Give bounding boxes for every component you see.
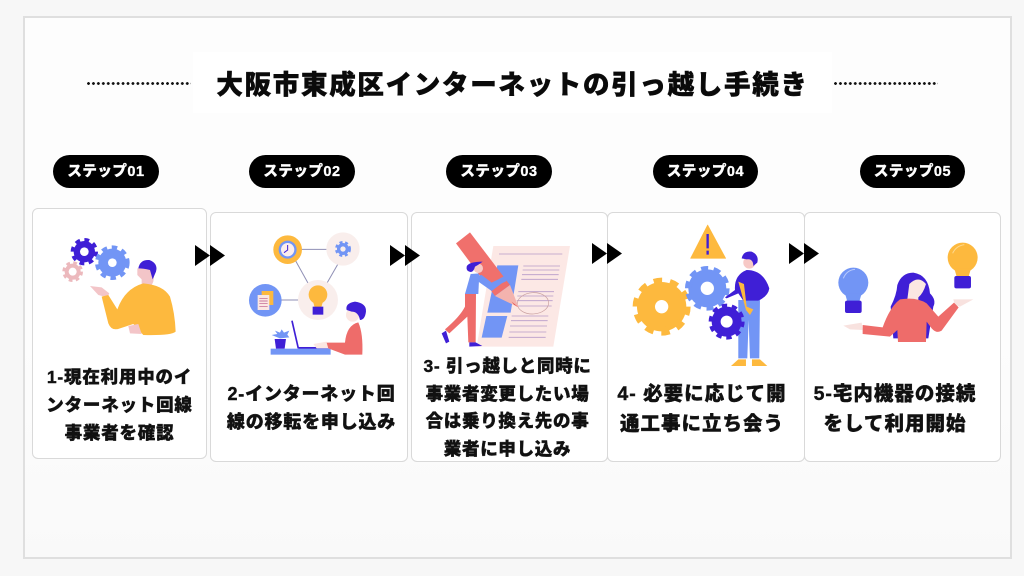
step badge 04: ステップ04 xyxy=(667,164,744,180)
right dotted rule xyxy=(834,82,938,85)
text: step 2 xyxy=(226,384,396,432)
icon: step 1 man with gears xyxy=(65,241,176,335)
left dotted rule xyxy=(87,82,191,85)
arrow: step 4 to 5 xyxy=(789,243,819,264)
text: step 3: 業者に申し込み xyxy=(444,439,571,459)
title: 大阪市東成区インターネットの引っ越し手続き xyxy=(216,70,809,100)
text: step 5 xyxy=(814,383,976,435)
step badge 01: ステップ01 xyxy=(67,164,145,180)
text: step 3: 3- 引っ越しと同時に xyxy=(423,356,592,376)
text: step 3: 合は乗り換え先の事 xyxy=(426,411,589,431)
text: step 2: 線の移転を申し込み xyxy=(227,412,396,432)
step badge 04 xyxy=(653,155,758,188)
arrow: step 1 to 2 xyxy=(195,245,225,266)
icon: step 5 woman with light bulbs xyxy=(838,243,978,342)
icon: step 2 network and person at laptop xyxy=(249,232,366,355)
text: step 1: 事業者を確認 xyxy=(65,423,174,443)
icon: step 3 person with pencil and document xyxy=(442,232,570,347)
step badge 03: ステップ03 xyxy=(460,164,538,180)
text: step 2: 2-インターネット回 xyxy=(227,384,396,404)
icon: step 4 warning, gears and worker xyxy=(637,225,769,366)
text: step 4: 4- 必要に応じて開 xyxy=(617,383,787,405)
step badge 01 xyxy=(53,155,159,188)
text: step 1: ンターネット回線 xyxy=(46,395,193,415)
text: step 4 xyxy=(617,382,787,435)
step badge 03 xyxy=(446,155,552,188)
text: step 5: 5-宅内機器の接続 xyxy=(814,383,976,405)
panel: step 4 card xyxy=(607,212,805,462)
step badge 05: ステップ05 xyxy=(874,164,951,180)
panel: step 5 card xyxy=(804,212,1001,462)
panel: step 2 card xyxy=(210,212,408,462)
arrow: step 2 to 3 xyxy=(390,245,420,266)
panel: step 3 card xyxy=(411,212,608,462)
text: step 1 xyxy=(46,367,193,443)
step badge 02 xyxy=(249,155,355,188)
title background xyxy=(193,52,832,113)
arrow: step 3 to 4 xyxy=(592,243,622,264)
text: step 3 xyxy=(423,356,592,459)
text: step 5: をして利用開始 xyxy=(824,413,966,435)
panel: step 1 card xyxy=(32,208,207,459)
text: step 3: 事業者変更したい場 xyxy=(426,384,589,404)
step badge 05 xyxy=(860,155,965,188)
step badge 02: ステップ02 xyxy=(263,164,341,180)
text: step 4: 通工事に立ち会う xyxy=(620,413,784,435)
text: step 1: 1-現在利用中のイ xyxy=(47,367,192,387)
